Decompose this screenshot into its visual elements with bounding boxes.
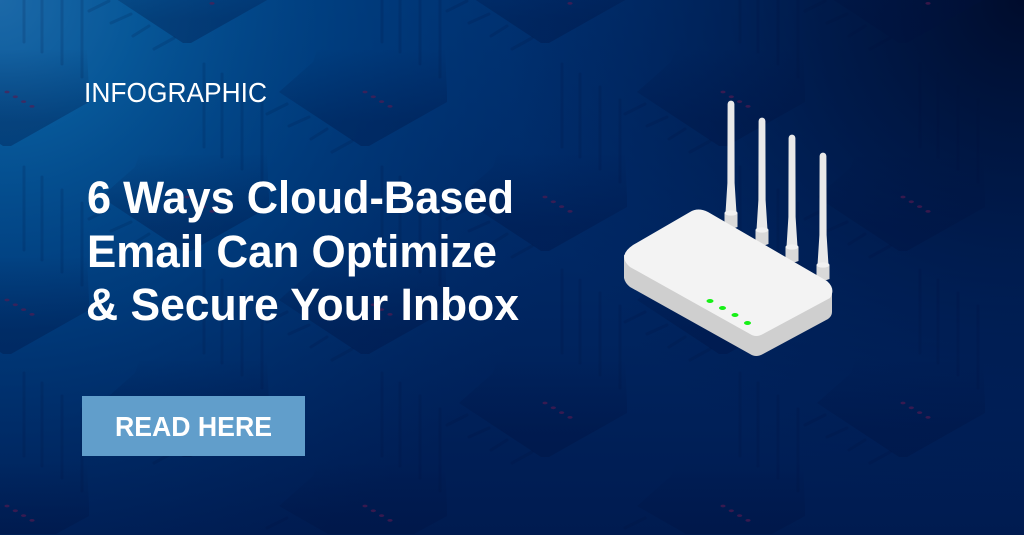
antenna 3 <box>786 135 798 262</box>
router top face <box>624 210 832 336</box>
antenna 1 <box>724 101 738 228</box>
antenna 2 <box>756 118 768 246</box>
eyebrow label: INFOGRAPHIC <box>84 77 267 108</box>
title: 6 Ways Cloud-Based <box>87 172 514 223</box>
router side <box>624 255 832 356</box>
icon: wifi router <box>624 101 832 356</box>
button: read here <box>82 396 305 456</box>
status lights <box>706 299 751 325</box>
title: & Secure Your Inbox <box>86 279 519 330</box>
button: read here: READ HERE <box>115 411 272 442</box>
antenna 4 <box>816 153 830 280</box>
title: Email Can Optimize <box>87 226 497 277</box>
title <box>86 172 519 330</box>
